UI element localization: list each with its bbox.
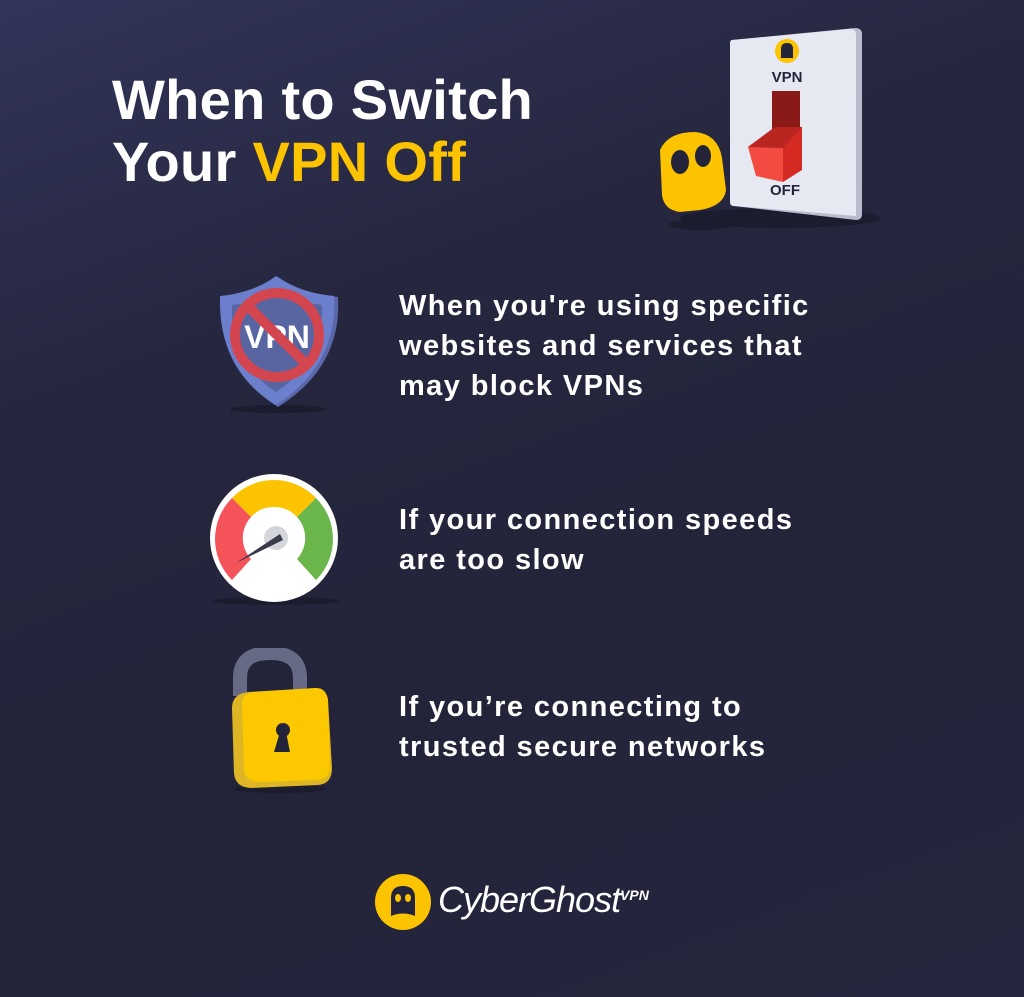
illustration: VPN switch with ghost: OFF [770, 182, 800, 199]
item 1 text: websites and services that [399, 330, 803, 362]
logo icon [375, 874, 431, 930]
item 1: shield icon [220, 276, 338, 413]
item 2 text: If your connection speeds [399, 504, 793, 536]
item 1 text: may block VPNs [399, 370, 644, 402]
item 3 text: If you’re connecting to [399, 691, 742, 723]
item 2 text: are too slow [399, 544, 585, 576]
title: When to Switch [112, 68, 533, 131]
title: Your VPN Off [112, 130, 466, 193]
item 3 text: trusted secure networks [399, 731, 766, 763]
logo: CyberGhost VPN [375, 874, 650, 930]
item 3: padlock icon [232, 648, 332, 793]
item 2: speedometer icon [210, 474, 340, 605]
item 1 text: When you're using specific [399, 290, 810, 322]
item 2 text [399, 504, 793, 576]
item 1 text [398, 290, 810, 402]
illustration: VPN switch with ghost [660, 28, 880, 230]
illustration: VPN switch with ghost: VPN [772, 69, 802, 86]
item 1: shield icon: VPN [244, 319, 310, 355]
logo text: CyberGhostVPN [438, 879, 649, 920]
item 3 text [399, 691, 766, 763]
title [112, 68, 533, 193]
